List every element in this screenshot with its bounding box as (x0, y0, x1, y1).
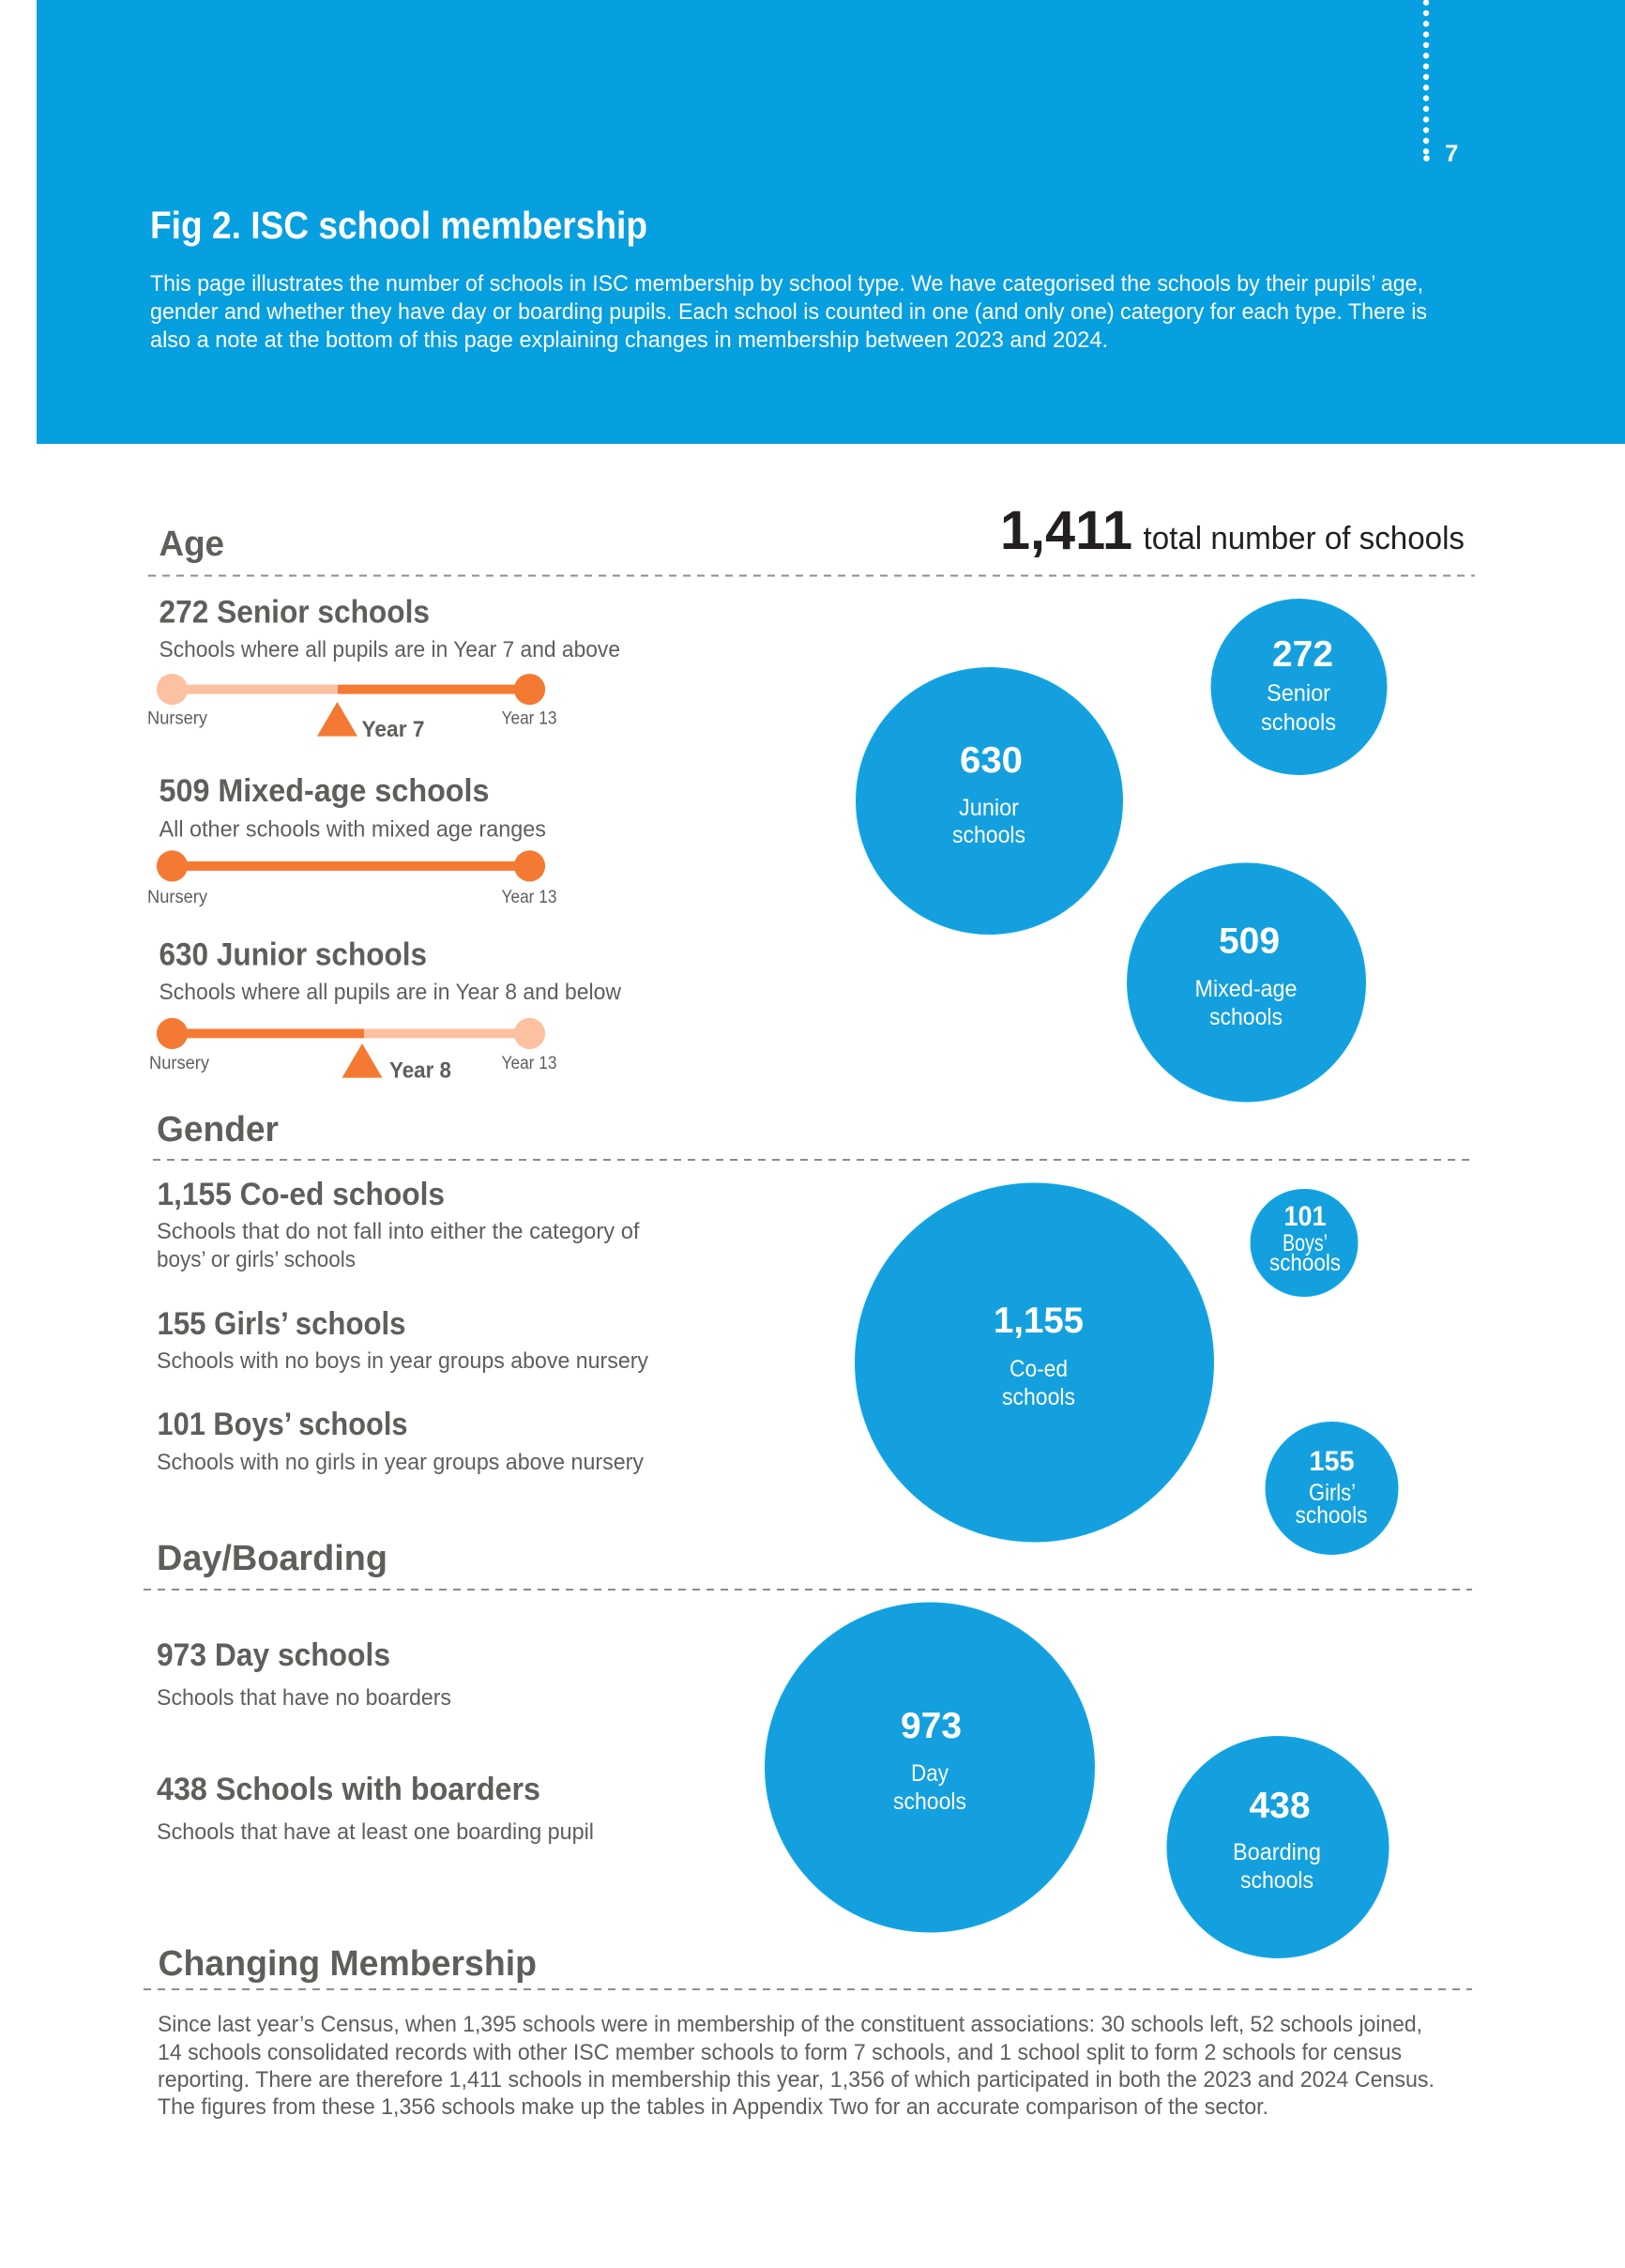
bubble: 155 girls: Girls’ (1309, 1480, 1356, 1506)
bubble: 438 boarding: schools (1240, 1867, 1314, 1894)
age range slider: Year 7 to Year 13: Nursery (147, 708, 207, 728)
bubble: 272 senior: schools (1261, 709, 1336, 736)
age range slider: Year 7 to Year 13 (147, 674, 557, 742)
bubble: 973 day: schools (893, 1789, 966, 1815)
bubble: 272 senior: 272 (1272, 634, 1333, 675)
heading: Age: Age (159, 525, 224, 564)
day schools block: 973 Day schools (157, 1637, 390, 1673)
junior schools block: Schools where all pupils are in Year 8 and below (159, 980, 621, 1005)
bubble: 272 senior: Senior (1267, 680, 1330, 707)
co-ed schools block: 1,155 Co-ed schools (158, 1177, 445, 1212)
page number: 7 (1445, 141, 1458, 167)
bubble: 630 junior: 630 (960, 740, 1023, 781)
bubble: 973 day (766, 1603, 1094, 1932)
bubble: 509 mixed-age: schools (1209, 1004, 1283, 1030)
co-ed schools block: boys’ or girls’ schools (157, 1247, 356, 1272)
bubble: 630 junior: Junior (959, 795, 1019, 821)
boys' schools block: 101 Boys’ schools (158, 1407, 407, 1442)
mixed-age schools block (147, 773, 557, 907)
membership change note: reporting. There are therefore 1,411 schools in membership this year, 1,356 of which participated in both the 2023 and 2024 Census. (158, 2067, 1435, 2093)
heading: Changing Membership: Changing Membership (158, 1944, 537, 1984)
boarding schools block: Schools that have at least one boarding pupil (157, 1819, 594, 1845)
bubble: 101 boys (1251, 1190, 1358, 1297)
age range slider: Nursery to Year 8 (149, 1018, 557, 1084)
bubble: 438 boarding: Boarding (1233, 1839, 1321, 1865)
bubble: 155 girls: schools (1295, 1502, 1368, 1529)
total number of schools (1000, 500, 1465, 561)
bubble: 509 mixed-age (1128, 863, 1366, 1102)
bubble: 438 boarding: 438 (1250, 1786, 1310, 1826)
page number dotted rule (1423, 3, 1430, 161)
bubble: 272 senior (1211, 599, 1387, 775)
bubble: 630 junior: schools (952, 822, 1025, 848)
bubble: 630 junior (856, 668, 1122, 935)
co-ed schools block: Schools that do not fall into either the category of (157, 1219, 640, 1244)
intro text: This page illustrates the number of schools in ISC membership by school type. We have categorised the schools by their pupils’ age, (150, 271, 1423, 297)
bubble: 1,155 co-ed: 1,155 (994, 1301, 1084, 1341)
bubble: 101 boys: 101 (1283, 1201, 1327, 1232)
age range slider: Year 7 to Year 13: Year 7 (362, 717, 424, 742)
header banner (37, 0, 1625, 444)
age range slider: Nursery to Year 8: Year 8 (389, 1058, 451, 1084)
bubble: 973 day: Day (911, 1760, 949, 1787)
mixed-age schools block: 509 Mixed-age schools (159, 773, 490, 809)
membership change note: 14 schools consolidated records with other ISC member schools to form 7 schools, and 1 school split to form 2 schools for census (158, 2040, 1402, 2065)
bubble: 155 girls: 155 (1310, 1446, 1355, 1477)
senior schools block: Schools where all pupils are in Year 7 and above (159, 637, 620, 662)
boarding schools block: 438 Schools with boarders (157, 1772, 540, 1807)
bubble: 438 boarding (1167, 1736, 1389, 1957)
title: Fig 2. ISC school membership (150, 204, 647, 247)
co-ed schools block (157, 1177, 640, 1272)
age range slider: Nursery to Year 8: Nursery (149, 1054, 209, 1073)
girls' schools block: Schools with no boys in year groups above nursery (157, 1348, 649, 1374)
age range slider: Nursery to Year 8: Year 13 (501, 1054, 557, 1073)
age range slider: Nursery to Year 13: Year 13 (501, 888, 557, 907)
bubble: 1,155 co-ed: schools (1002, 1384, 1075, 1410)
day schools block: Schools that have no boarders (157, 1685, 451, 1711)
boys' schools block: Schools with no girls in year groups above nursery (157, 1450, 645, 1475)
bubble: 101 boys: Boys’ (1283, 1230, 1328, 1256)
senior schools block (147, 595, 620, 742)
bubble: 973 day: 973 (901, 1706, 962, 1746)
bubble: 509 mixed-age: 509 (1219, 921, 1280, 961)
junior schools block: 630 Junior schools (159, 937, 427, 973)
membership change note: The figures from these 1,356 schools make up the tables in Appendix Two for an accurate comparison of the sector. (158, 2094, 1268, 2120)
senior schools block: 272 Senior schools (159, 595, 430, 631)
membership change note (158, 2012, 1435, 2120)
bubble: 1,155 co-ed (856, 1183, 1214, 1542)
age range slider: Nursery to Year 13: Nursery (147, 888, 207, 907)
total number of schools: 1,411 (1000, 500, 1132, 561)
boys' schools block (157, 1407, 645, 1475)
heading: Day/Boarding: Day/Boarding (157, 1539, 387, 1578)
intro text (150, 271, 1427, 353)
boarding schools block (157, 1772, 594, 1845)
intro text: gender and whether they have day or boarding pupils. Each school is counted in one (and only one) category for each type. There is (150, 299, 1427, 325)
intro text: also a note at the bottom of this page explaining changes in membership between 2023 and 2024. (150, 327, 1108, 353)
heading: Gender: Gender (157, 1110, 279, 1149)
bubble: 155 girls (1266, 1423, 1398, 1554)
total number of schools: total number of schools (1143, 521, 1465, 556)
day schools block (157, 1637, 451, 1711)
membership change note: Since last year’s Census, when 1,395 schools were in membership of the constituent associations: 30 schools left, 52 schools joined, (158, 2012, 1422, 2037)
age range slider: Year 7 to Year 13: Year 13 (501, 708, 557, 728)
girls' schools block: 155 Girls’ schools (158, 1306, 405, 1342)
mixed-age schools block: All other schools with mixed age ranges (159, 816, 546, 842)
age range slider: Nursery to Year 13 (147, 850, 557, 907)
girls' schools block (157, 1306, 649, 1374)
bubble: 1,155 co-ed: Co-ed (1010, 1356, 1068, 1382)
bubble: 509 mixed-age: Mixed-age (1195, 976, 1297, 1002)
bubble: 101 boys: schools (1269, 1250, 1341, 1276)
junior schools block (149, 937, 621, 1084)
